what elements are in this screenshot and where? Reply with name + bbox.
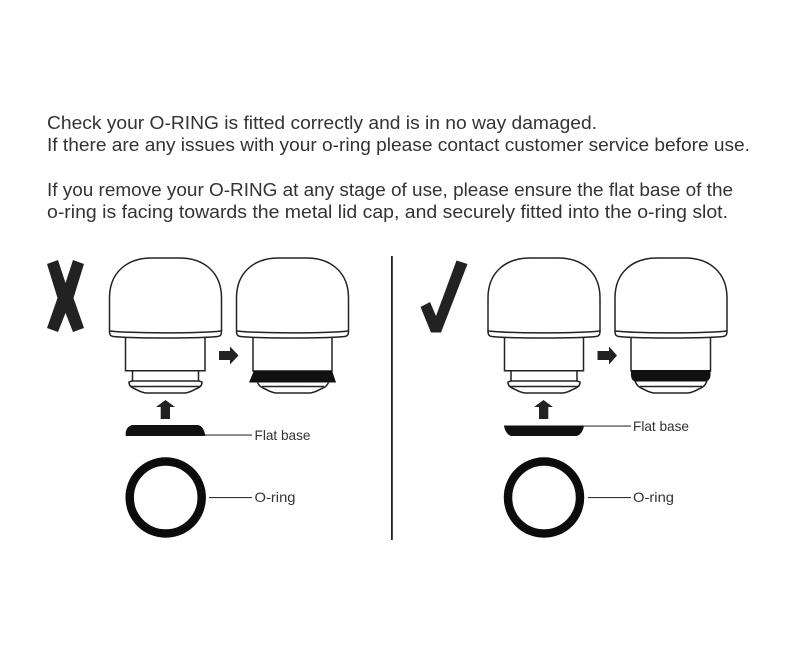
- o-ring: [508, 462, 580, 534]
- lid: o-ring fitted correctly: [615, 258, 727, 393]
- instructions: second paragraph: o-ring is facing towards the metal lid cap, and securely fitted into the o-ring slot.: [47, 201, 728, 222]
- icon: correct check mark: [420, 260, 468, 332]
- instructions: second paragraph: If you remove your O-RING at any stage of use, please ensure the flat base of the: [47, 179, 733, 200]
- o-ring profile: flat base down: [126, 425, 206, 436]
- arrow: right: [219, 346, 238, 364]
- divider line: [391, 256, 393, 540]
- label: flat base: [584, 419, 689, 434]
- lid: before fitting: [488, 258, 600, 393]
- label: o-ring: [209, 490, 296, 505]
- icon: incorrect cross: [47, 260, 84, 332]
- instructions: second paragraph: [47, 179, 733, 222]
- o-ring: [130, 462, 202, 534]
- label: flat base: [205, 428, 310, 443]
- arrow: right: [598, 346, 617, 364]
- panel: incorrect fitting: [110, 258, 348, 534]
- label: o-ring: O-ring: [633, 490, 674, 505]
- o-ring profile: flat base up: [504, 426, 584, 436]
- label: o-ring: O-ring: [254, 490, 296, 505]
- label: flat base: Flat base: [254, 428, 310, 443]
- instructions: first paragraph: Check your O-RING is fitted correctly and is in no way damaged.: [47, 112, 597, 133]
- instructions: first paragraph: [47, 112, 750, 155]
- lid: o-ring fitted upside down: [236, 258, 348, 393]
- label: o-ring: [588, 490, 674, 505]
- instructions: first paragraph: If there are any issues with your o-ring please contact customer service before use.: [47, 134, 750, 155]
- label: flat base: Flat base: [633, 419, 689, 434]
- lid: before fitting: [110, 258, 222, 393]
- arrow: up: [156, 400, 175, 419]
- arrow: up: [534, 400, 553, 419]
- panel: correct fitting: [488, 258, 727, 534]
